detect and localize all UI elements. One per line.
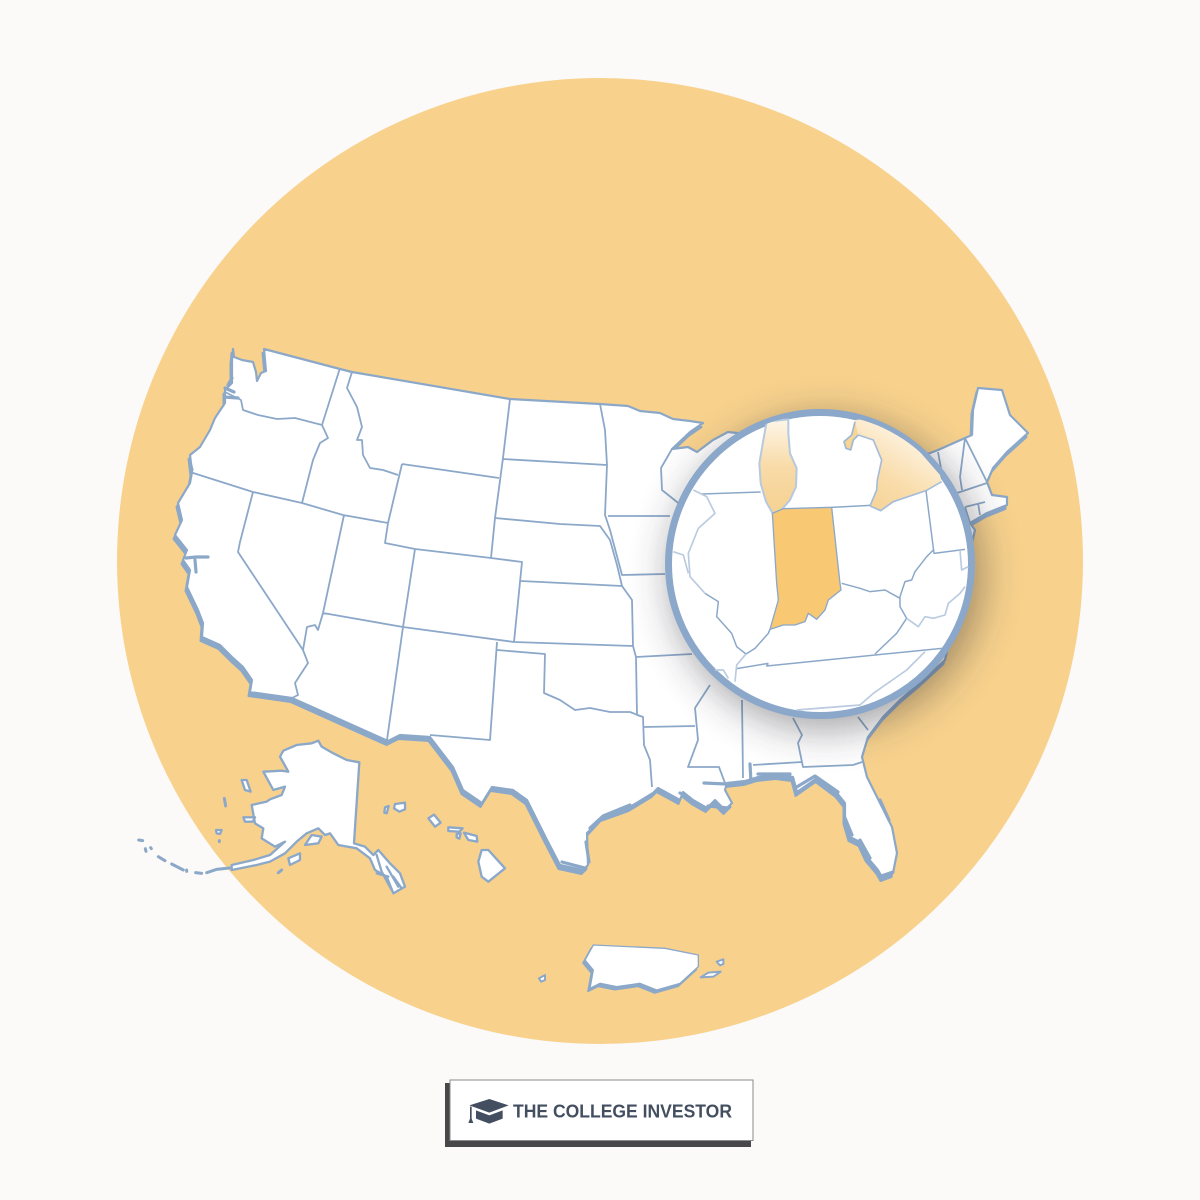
Alaska islands xyxy=(216,780,322,865)
Michigan east shore line xyxy=(858,435,942,511)
map coastline shadow xyxy=(174,353,1026,881)
Lake Michigan xyxy=(759,419,797,513)
magnifier lens shadow xyxy=(671,419,981,729)
Puerto Rico main island xyxy=(585,945,698,990)
map: Hawaii xyxy=(384,803,505,882)
map: Alaska and islands xyxy=(139,741,405,893)
lens contents xyxy=(673,418,968,710)
Hawaiian islands xyxy=(384,803,505,882)
coastal detail: Puget Sound, Columbia, San Francisco Bay, Gulf and Florida marshes xyxy=(186,378,893,876)
yellow circle backdrop xyxy=(117,78,1083,1044)
Lakes Huron and Erie xyxy=(853,418,942,510)
map of the contiguous United States xyxy=(174,349,1028,881)
logo wordmark: THE COLLEGE INVESTOR xyxy=(513,1102,732,1122)
mainland white fill xyxy=(175,349,1028,877)
icon: graduation cap xyxy=(468,1099,509,1124)
Alaska panhandle island cluster xyxy=(377,855,402,890)
Alaska mainland xyxy=(232,741,405,893)
logo badge xyxy=(445,1080,753,1147)
logo box xyxy=(450,1080,753,1140)
Puerto Rico small islands xyxy=(539,959,723,982)
pale river borders near lens edge xyxy=(673,490,968,710)
logo shadow xyxy=(445,1083,751,1147)
Saginaw-area shoreline xyxy=(844,422,858,450)
Aleutian island chain xyxy=(139,798,282,873)
neighboring state borders xyxy=(702,491,965,669)
map: Puerto Rico xyxy=(539,945,723,993)
state border lines xyxy=(190,368,987,787)
Puerto Rico shadow xyxy=(583,948,696,993)
Indiana highlighted xyxy=(770,507,841,629)
magnifier lens xyxy=(668,412,972,716)
lens ring xyxy=(668,412,972,716)
